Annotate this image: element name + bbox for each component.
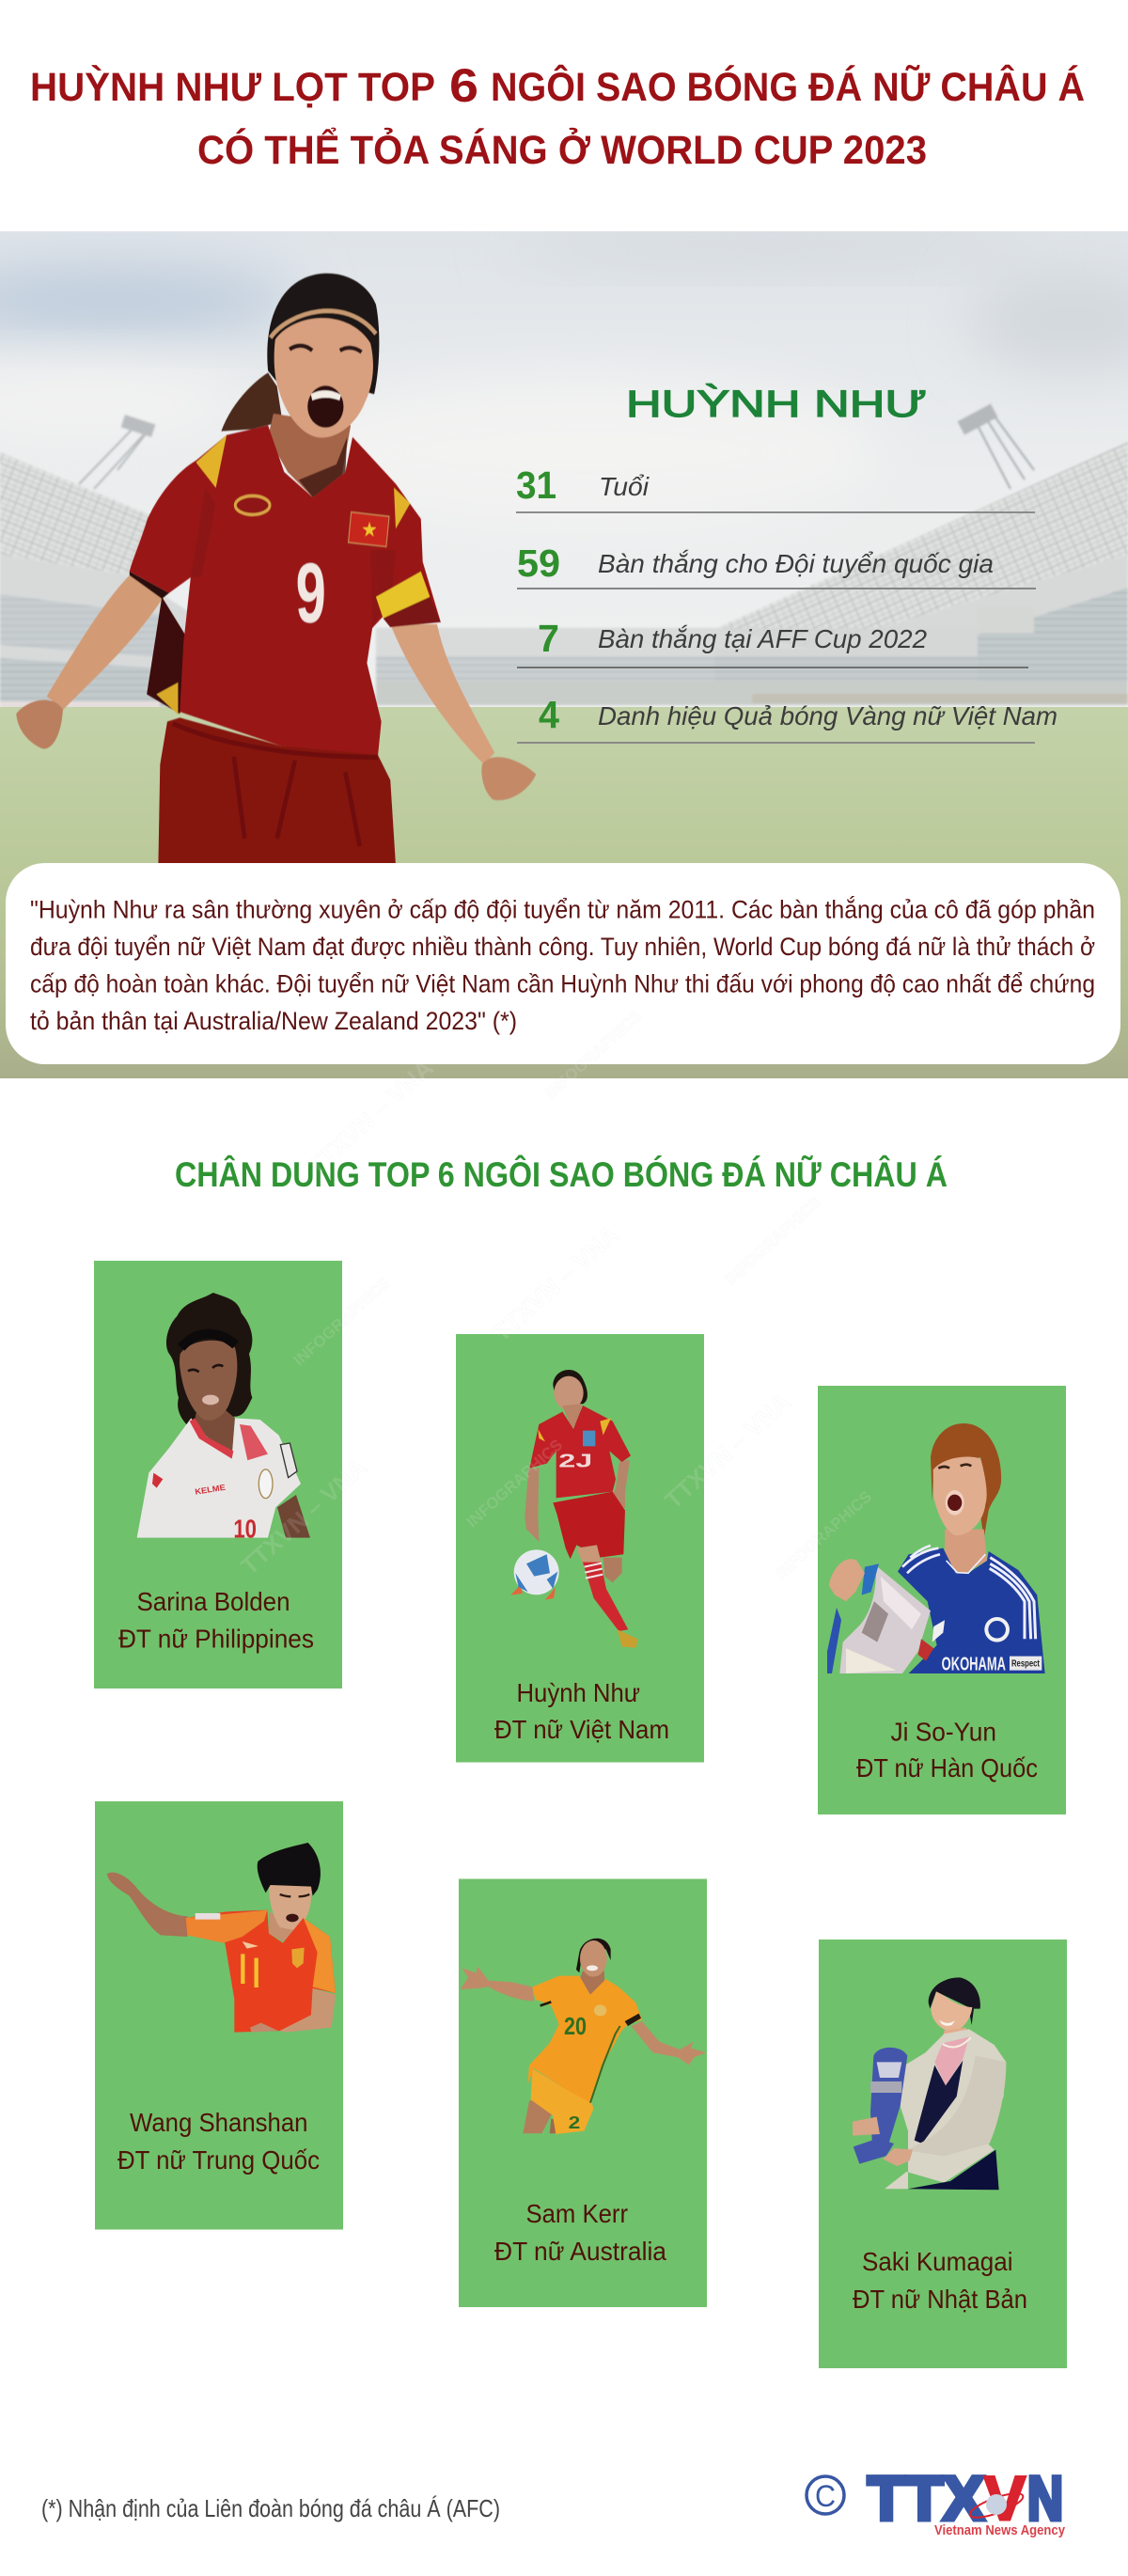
flag patch: ★	[362, 521, 377, 539]
team: ĐT nữ Australia	[494, 2237, 666, 2266]
name: Saki Kumagai	[862, 2247, 1013, 2276]
armband	[376, 572, 430, 619]
portrait: Sam Kerr: 2	[569, 2113, 580, 2132]
section heading: CHÂN DUNG TOP 6 NGÔI SAO BÓNG ĐÁ NỮ CHÂU Á	[175, 1154, 948, 1194]
hair	[267, 274, 379, 394]
watermarks: INFOGRAPHICS	[542, 1007, 645, 1103]
title: NGÔI SAO BÓNG ĐÁ NỮ CHÂU Á	[491, 64, 1085, 110]
portrait: Sam Kerr	[461, 1939, 706, 2134]
left arm	[47, 573, 164, 710]
watermarks: INFOGRAPHICS	[463, 1436, 566, 1531]
copyright icon	[807, 2476, 844, 2514]
sleeve cuff	[130, 572, 169, 599]
jersey number: 9	[296, 545, 326, 640]
stadium stands	[0, 404, 1128, 713]
team: ĐT nữ Trung Quốc	[118, 2145, 320, 2175]
quote text	[30, 895, 1095, 1035]
quote text: tỏ bản thân tại Australia/New Zealand 2023" (*)	[30, 1007, 517, 1035]
quote box	[6, 863, 1120, 1064]
card: Saki Kumagai	[819, 1940, 1067, 2368]
agency name: Vietnam News Agency	[934, 2522, 1066, 2538]
title	[30, 59, 1085, 173]
stat: age: 31	[516, 463, 556, 507]
copyright icon: C	[815, 2479, 836, 2513]
back of jersey	[147, 597, 184, 715]
portrait: Ji So-Yun: Respect	[1011, 1659, 1040, 1670]
portrait: Huỳnh Như	[510, 1370, 637, 1648]
watermarks: TTXVN – VNA	[302, 1053, 439, 1181]
ponytail	[221, 372, 282, 432]
shorts folds	[173, 724, 378, 846]
armband cuff	[384, 597, 441, 627]
portrait: Sarina Bolden: 10	[233, 1515, 257, 1544]
portrait: Ji So-Yun: OKOHAMA	[942, 1655, 1006, 1675]
player name: HUỲNH NHƯ	[626, 383, 927, 425]
stat: golden ball: Danh hiệu Quả bóng Vàng nữ Việt Nam	[598, 701, 1058, 730]
wordmark: TTX	[868, 2463, 984, 2533]
stat: golden ball: 4	[539, 693, 559, 736]
portrait: Huỳnh Như: 2J	[558, 1451, 592, 1472]
watermarks: INFOGRAPHICS	[290, 1274, 393, 1370]
title: HUỲNH NHƯ LỌT TOP	[30, 65, 435, 110]
watermarks: TTXVN – VNA	[659, 1387, 796, 1515]
team: ĐT nữ Philippines	[118, 1625, 314, 1653]
card: Huỳnh Như	[456, 1334, 704, 1762]
jersey	[130, 425, 441, 758]
shoulder stripes	[196, 435, 410, 528]
logo: TTXVN	[807, 2463, 1066, 2538]
flag patch	[349, 512, 389, 546]
title: 6	[449, 59, 478, 112]
watermarks: INFOGRAPHICS	[722, 1193, 824, 1289]
wordmark	[868, 2463, 1063, 2533]
portrait: Wang Shanshan	[107, 1843, 336, 2033]
shorts	[158, 717, 396, 865]
stat: age: Tuổi	[599, 472, 650, 501]
sky background	[0, 230, 1128, 720]
stat: AFF goals	[517, 617, 1028, 668]
shawl sleeve	[906, 2056, 1006, 2156]
portrait: Sarina Bolden: KELME	[195, 1483, 227, 1497]
neck	[268, 414, 351, 497]
eyes	[290, 346, 362, 352]
portrait: Saki Kumagai	[853, 1977, 1006, 2190]
watermarks: TTXVN – VNA	[487, 1219, 624, 1347]
name: Huỳnh Như	[517, 1678, 640, 1707]
globe	[967, 2489, 1026, 2522]
right arm	[390, 624, 494, 764]
jersey shading	[191, 488, 396, 628]
title: CÓ THỂ TỎA SÁNG Ở WORLD CUP 2023	[197, 127, 927, 173]
name: Wang Shanshan	[130, 2108, 308, 2137]
panel: hero	[0, 230, 1128, 1078]
card: Sam Kerr	[459, 1878, 707, 2307]
pitch	[0, 707, 1128, 1078]
stat: national goals: Bàn thắng cho Đội tuyển quốc gia	[598, 549, 994, 578]
watermarks: INFOGRAPHICS	[773, 1487, 875, 1583]
footnote: (*) Nhận định của Liên đoàn bóng đá châu Á (AFC)	[41, 2494, 500, 2522]
watermarks	[235, 1007, 875, 1583]
mouth	[307, 385, 343, 428]
team: ĐT nữ Hàn Quốc	[856, 1753, 1038, 1783]
portrait: Sarina Bolden	[137, 1293, 310, 1544]
watermarks: TTXVN – VNA	[235, 1453, 372, 1580]
name: Sam Kerr	[526, 2199, 628, 2228]
chin shadow	[299, 437, 347, 497]
face	[274, 318, 373, 437]
name: Sarina Bolden	[137, 1587, 290, 1616]
team: ĐT nữ Việt Nam	[494, 1715, 669, 1744]
team: ĐT nữ Nhật Bản	[853, 2285, 1027, 2314]
huynh nhu player photo	[16, 274, 536, 865]
card: Wang Shanshan	[95, 1801, 343, 2230]
stat: age	[516, 472, 1035, 513]
card: Sarina Bolden	[94, 1261, 342, 1689]
name: Ji So-Yun	[891, 1717, 996, 1747]
right fist	[481, 757, 536, 800]
stat: national goals	[517, 542, 1036, 589]
stat: national goals: 59	[517, 542, 560, 585]
left fist	[16, 700, 63, 749]
portrait: Ji So-Yun	[827, 1423, 1045, 1675]
card: Ji So-Yun	[818, 1386, 1066, 1814]
stat: AFF goals: Bàn thắng tại AFF Cup 2022	[598, 624, 927, 653]
headband	[271, 311, 376, 338]
jersey logo	[235, 495, 270, 514]
wordmark: N	[1027, 2463, 1063, 2533]
wordmark: V	[984, 2463, 1026, 2533]
portrait: Sam Kerr: 20	[564, 2012, 587, 2040]
stat: AFF goals: 7	[538, 617, 559, 660]
stat: golden ball	[517, 693, 1058, 744]
